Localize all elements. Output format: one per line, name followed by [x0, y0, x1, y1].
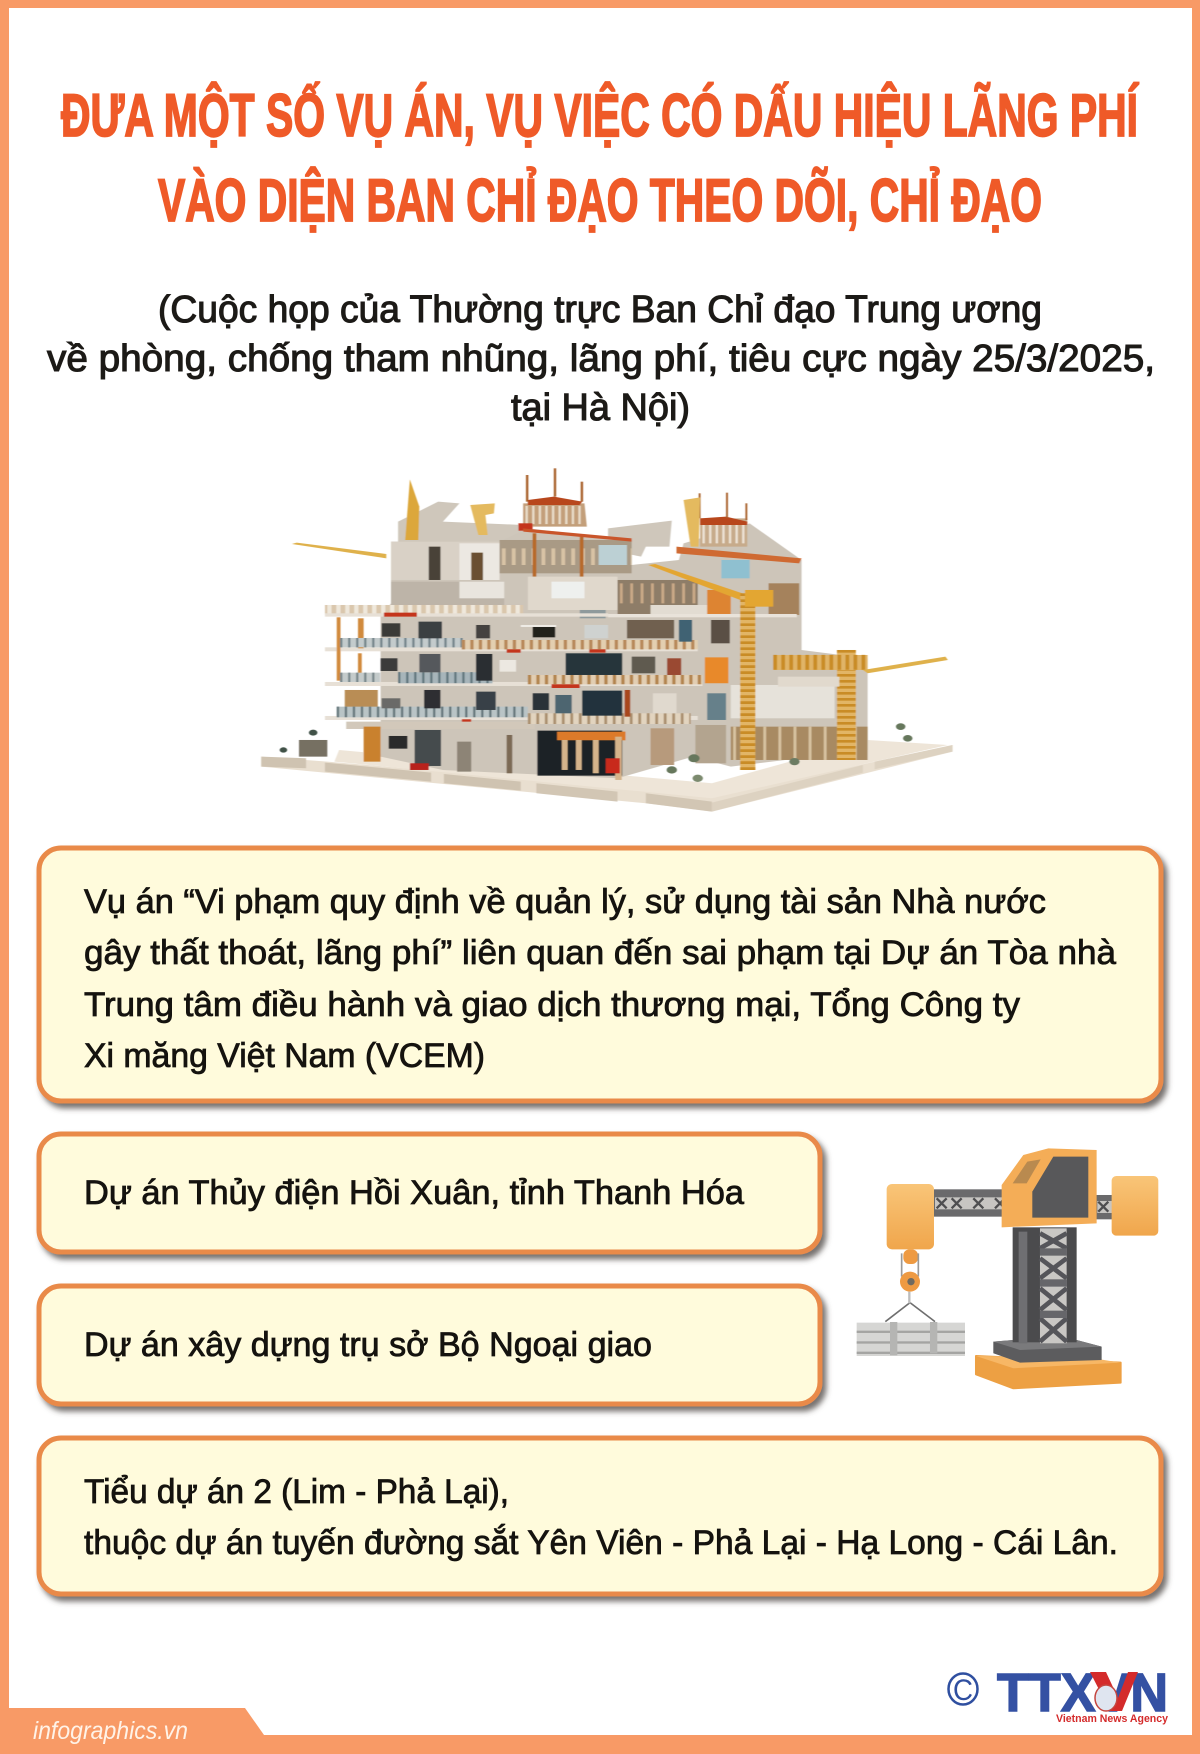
logo: TTXVN: TTXVN: [997, 1663, 1168, 1723]
panel: Lim - Pha Lai sub-project: thuộc dự án tuyến đường sắt Yên Viên - Phả Lại - Hạ Long - Cái Lân.: [84, 1524, 1118, 1562]
icon: tower crane: [857, 1148, 1158, 1388]
tower: [1013, 1227, 1077, 1342]
footer tab: infographics.vn: infographics.vn: [33, 1717, 188, 1745]
subtitle: về phòng, chống tham nhũng, lãng phí, tiêu cực ngày 25/3/2025,: [47, 338, 1155, 380]
roof structures: [523, 503, 587, 527]
panel: VCEM case: gây thất thoát, lãng phí” liên quan đến sai phạm tại Dự án Tòa nhà: [84, 934, 1116, 972]
body: [381, 523, 868, 778]
cab: [1002, 1148, 1097, 1227]
panel: Hoi Xuan hydropower: Dự án Thủy điện Hồi Xuân, tỉnh Thanh Hóa: [84, 1174, 744, 1212]
panel: Hoi Xuan hydropower: [39, 1134, 820, 1252]
panel: Foreign Ministry headquarters: Dự án xây dựng trụ sở Bộ Ngoại giao: [84, 1326, 652, 1364]
ground platform: [261, 745, 953, 812]
title: [61, 82, 1139, 234]
foot: [976, 1356, 1121, 1388]
panel: VCEM case: [39, 848, 1161, 1101]
footer tab: infographics.vn: [0, 1708, 1200, 1754]
panel: Foreign Ministry headquarters: [39, 1286, 820, 1404]
panel: VCEM case: Trung tâm điều hành và giao dịch thương mại, Tổng Công ty: [84, 986, 1020, 1024]
subtitle: [47, 289, 1155, 429]
hook: [903, 1249, 918, 1264]
left posts: [337, 617, 341, 681]
panel: VCEM case: Xi măng Việt Nam (VCEM): [84, 1037, 485, 1075]
subtitle: tại Hà Nội): [511, 387, 690, 429]
ground floor: [364, 727, 381, 762]
counterweights: [887, 1184, 934, 1249]
rubble back walls: [398, 502, 523, 547]
balconies: [340, 638, 463, 647]
panel: Lim - Pha Lai sub-project: Tiểu dự án 2 (Lim - Phả Lại),: [84, 1473, 509, 1511]
jibs: [934, 1189, 1017, 1217]
logo: TTXVN: Vietnam News Agency: [1056, 1713, 1169, 1725]
cranes: [292, 543, 386, 558]
subtitle: (Cuộc họp của Thường trực Ban Chỉ đạo Trung ương: [158, 289, 1042, 331]
windows: [429, 547, 441, 580]
logo: TTXVN: C: [953, 1674, 973, 1707]
slabs: [325, 605, 523, 615]
load: [857, 1323, 965, 1356]
shrubs: [309, 730, 317, 736]
panel: VCEM case: Vụ án “Vi phạm quy định về quản lý, sử dụng tài sản Nhà nước: [84, 883, 1046, 921]
illustration: building under construction: [261, 468, 953, 812]
panel: Lim - Pha Lai sub-project: [39, 1438, 1161, 1594]
